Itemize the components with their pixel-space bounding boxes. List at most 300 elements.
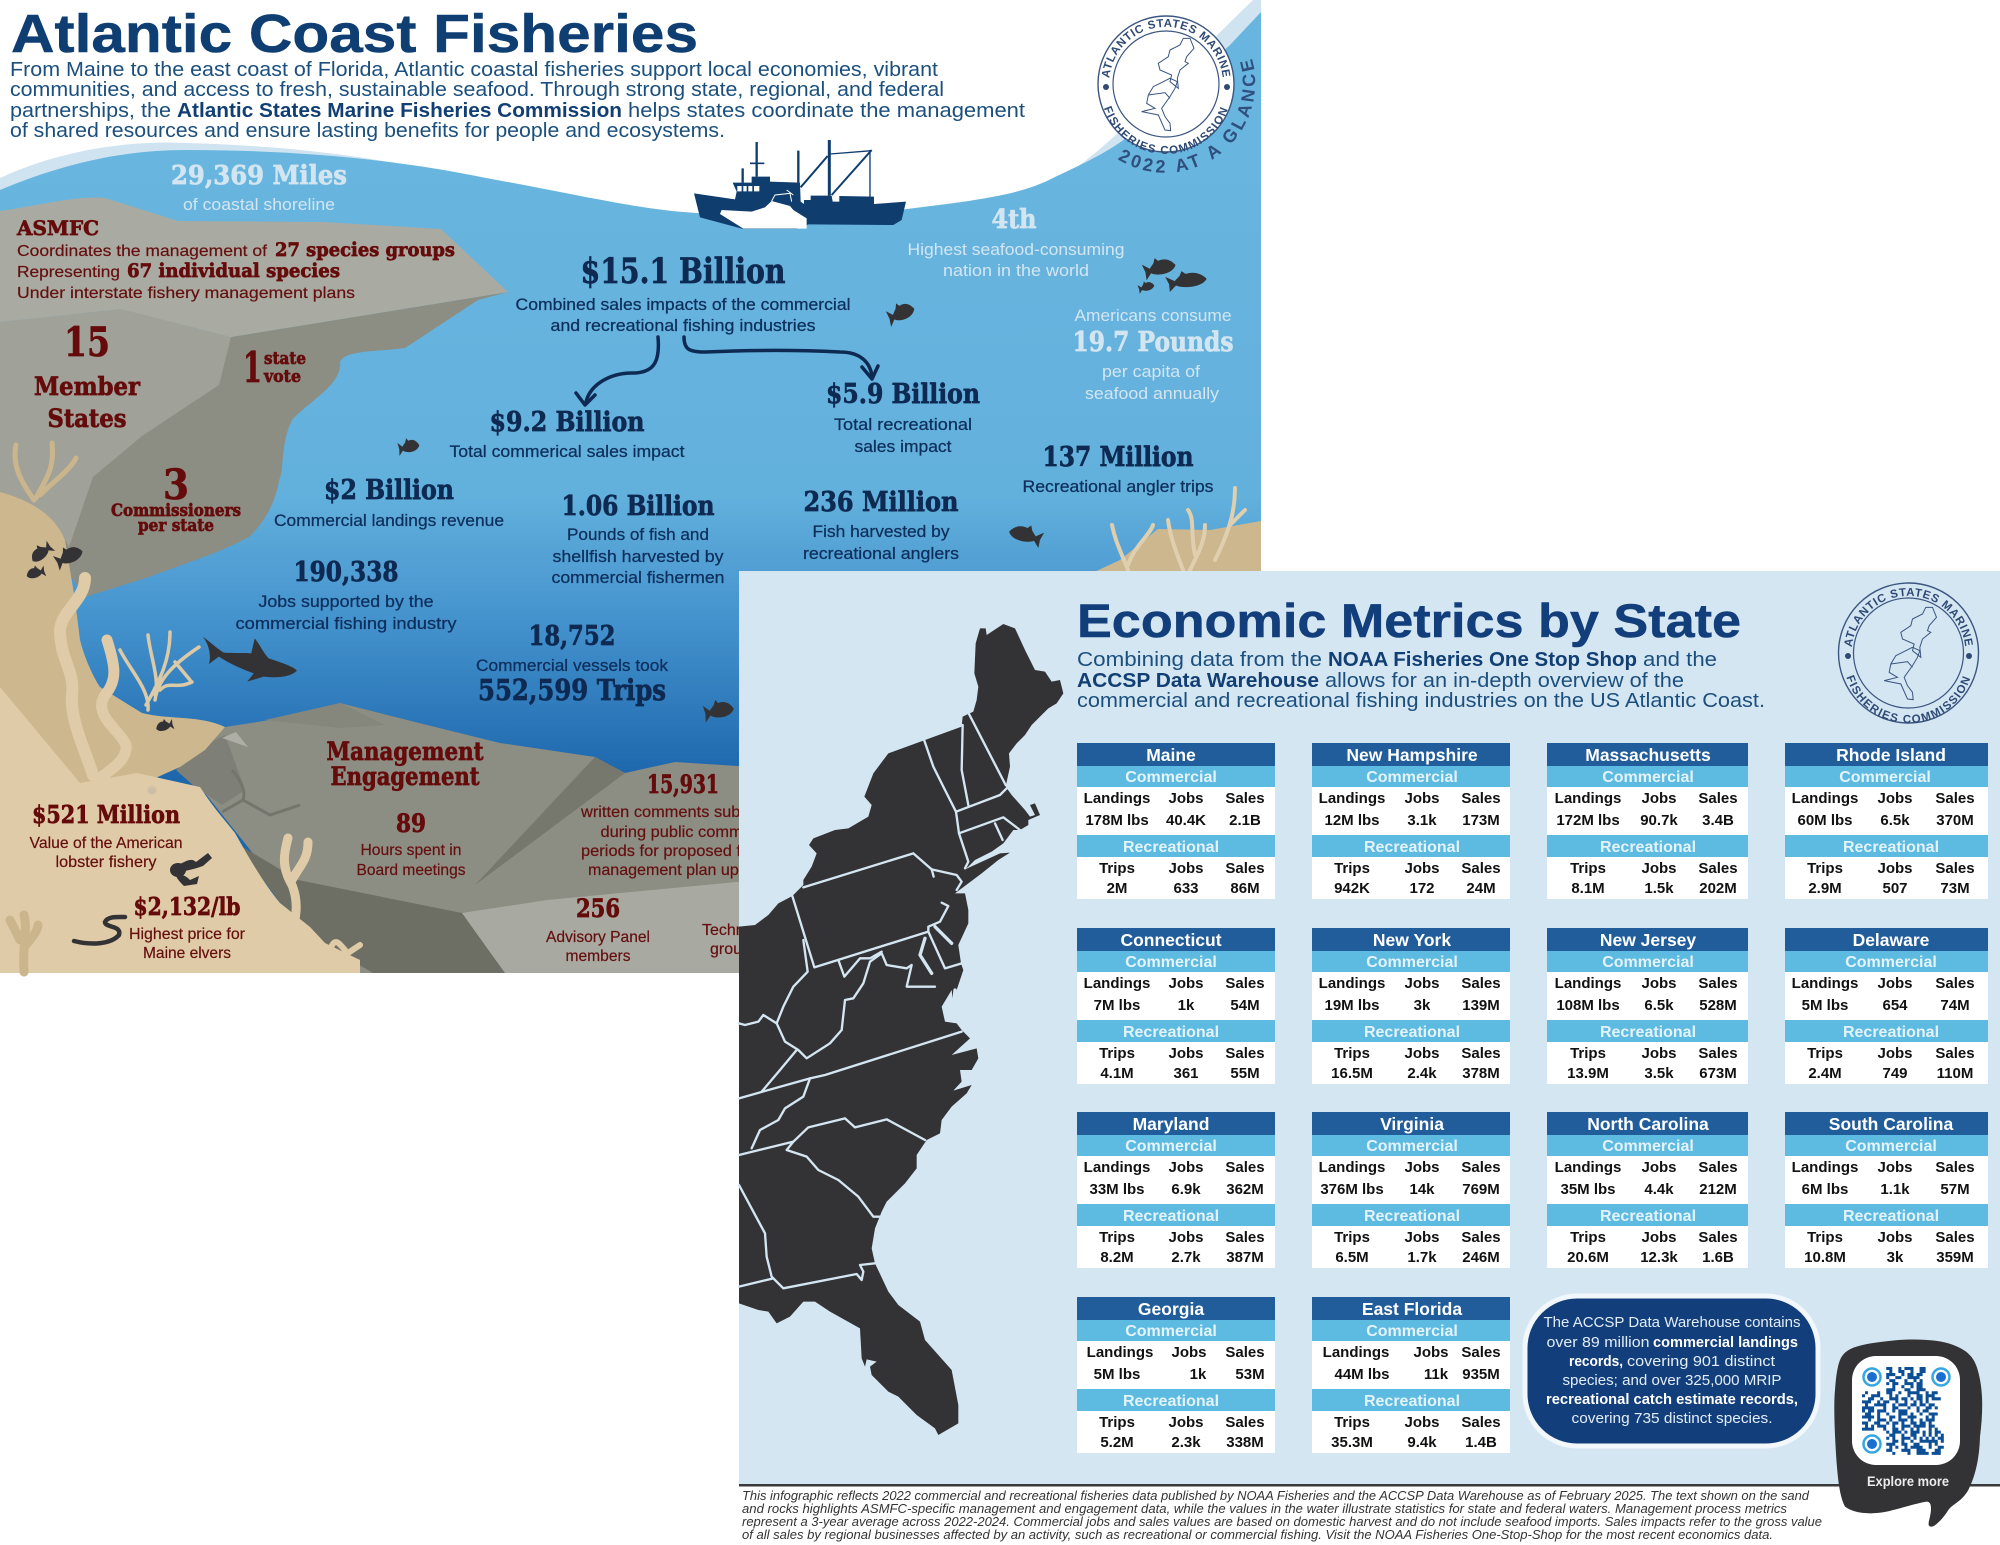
card: North Carolina: 1.6B <box>1702 1249 1734 1266</box>
sand: left seabed <box>0 492 360 973</box>
card: Rhode Island: Commercial <box>1839 769 1931 786</box>
callout: ACCSP data warehouse <box>1525 1296 1818 1446</box>
text block: data intro: allows for an in-depth overview of the <box>1325 670 1684 692</box>
card: Maine: Trips <box>1099 860 1135 877</box>
icon: ASMFC seal small: FISHERIES COMMISSION <box>1846 674 1970 723</box>
card: Virginia: 1.7k <box>1407 1249 1437 1266</box>
stat: fish harvested: recreational anglers <box>803 545 959 563</box>
card: Maryland <box>1077 1112 1275 1268</box>
stat: coastal shoreline: of coastal shoreline <box>183 196 335 214</box>
stat: landings revenue <box>274 475 504 530</box>
card: Connecticut: 54M <box>1230 997 1260 1014</box>
stat: member states <box>34 319 141 433</box>
card: Virginia: 246M <box>1462 1249 1500 1266</box>
stat: fish harvested: Fish harvested by <box>812 523 950 541</box>
stat: vessels and trips <box>476 621 669 707</box>
card: Massachusetts: 8.1M <box>1571 880 1605 897</box>
stat: angler trips: Recreational angler trips <box>1022 478 1214 496</box>
stat: landings revenue: Commercial landings revenue <box>274 512 504 530</box>
text: 2022 at a glance: 2022 AT A GLANCE <box>1118 59 1256 173</box>
stat: combined sales: Combined sales impacts of the commercial <box>516 296 850 314</box>
card: North Carolina: Jobs <box>1641 1159 1677 1176</box>
card: Delaware: Recreational <box>1843 1024 1939 1041</box>
card: Delaware: 749 <box>1882 1065 1908 1082</box>
text block: data intro <box>1077 649 1765 712</box>
card: Rhode Island: 370M <box>1936 812 1974 829</box>
card: Georgia: Landings <box>1087 1344 1153 1361</box>
card: North Carolina: 20.6M <box>1567 1249 1609 1266</box>
card: Maryland: 387M <box>1226 1249 1264 1266</box>
card: Maine: Jobs <box>1168 790 1204 807</box>
card: New Jersey: 3.5k <box>1644 1065 1674 1082</box>
card: New Jersey: 673M <box>1699 1065 1737 1082</box>
card: Maryland: Recreational <box>1123 1208 1219 1225</box>
stat: state vote: 1 <box>243 343 262 392</box>
stat: member states: Member <box>34 372 141 401</box>
card: Rhode Island <box>1785 743 1988 899</box>
card: East Florida <box>1312 1297 1510 1453</box>
icon: ASMFC seal small: ATLANTIC STATES MARINE <box>1844 588 1973 647</box>
card: Virginia: Virginia <box>1380 1114 1444 1134</box>
stat: elver price: $2,132/lb <box>134 892 240 921</box>
icon: fish silhouettes <box>25 254 1209 734</box>
stat: coastal shoreline: 29,369 Miles <box>171 161 347 191</box>
footnote rule and text: This infographic reflects 2022 commercial and recreational fisheries data published by NOAA Fisheries and the ACCSP Data Warehouse as of February 2025. The text shown on the sand <box>742 1488 1810 1503</box>
footnote rule and text: of all sales by regional businesses affected by an activity, such as recreational or commercial fishing. Visit the NOAA Fisheries One-Stop-Shop for the most recent economics data. <box>742 1527 1773 1542</box>
card: Rhode Island: 507 <box>1882 880 1908 897</box>
stat: vessels and trips: 18,752 <box>528 621 616 652</box>
stat: advisory panel: Advisory Panel <box>546 929 650 946</box>
stat: technical groups <box>702 922 769 958</box>
card: Georgia: 53M <box>1235 1366 1265 1383</box>
card: New York: Commercial <box>1366 954 1458 971</box>
card: North Carolina: 212M <box>1699 1181 1737 1198</box>
text block: data intro: and the <box>1643 649 1717 671</box>
card: Virginia: Sales <box>1461 1229 1501 1246</box>
icon: eel <box>74 917 125 943</box>
card: South Carolina: Landings <box>1792 1159 1858 1176</box>
card: Connecticut: 4.1M <box>1100 1065 1134 1082</box>
card: Georgia: 5M lbs <box>1094 1366 1140 1383</box>
card: East Florida: 11k <box>1424 1366 1449 1383</box>
card: New York: Jobs <box>1404 975 1440 992</box>
stat: technical groups: Technical <box>702 922 769 939</box>
card: Georgia: 5.2M <box>1100 1434 1134 1451</box>
card: New York: 378M <box>1462 1065 1500 1082</box>
card: Rhode Island: Jobs <box>1877 860 1913 877</box>
stat: commissioners: per state <box>138 516 214 536</box>
card: Virginia: Trips <box>1334 1229 1370 1246</box>
stat: pounds harvested: commercial fishermen <box>552 569 724 587</box>
card: Georgia: 2.3k <box>1171 1434 1201 1451</box>
card: Maine: 633 <box>1173 880 1199 897</box>
card: Massachusetts: Jobs <box>1641 860 1677 877</box>
card: Delaware: 5M lbs <box>1802 997 1848 1014</box>
card: Maryland: Sales <box>1225 1159 1265 1176</box>
stat: lobster value: lobster fishery <box>56 854 156 871</box>
stat: per capita seafood: Americans consume <box>1074 307 1232 325</box>
card: East Florida: 1.4B <box>1465 1434 1497 1451</box>
stat: advisory panel: members <box>566 948 630 965</box>
card: New Hampshire: 173M <box>1462 812 1500 829</box>
callout: ACCSP data warehouse: over 89 million <box>1546 1334 1650 1351</box>
card: South Carolina: Sales <box>1935 1229 1975 1246</box>
panel: Atlantic Coast Fisheries poster <box>0 0 1261 976</box>
card: South Carolina: Trips <box>1807 1229 1843 1246</box>
rock: lower engagement shelf <box>176 703 800 973</box>
card: Maine: Landings <box>1084 790 1150 807</box>
stat: written comments: during public comment <box>600 824 766 841</box>
stat: angler trips: 137 Million <box>1042 442 1194 473</box>
card: South Carolina: Commercial <box>1845 1138 1937 1155</box>
stat: commercial jobs <box>236 557 457 633</box>
card: Connecticut: 7M lbs <box>1094 997 1140 1014</box>
card: New Jersey: 6.5k <box>1644 997 1674 1014</box>
card: East Florida: Landings <box>1323 1344 1389 1361</box>
coral and kelp: left <box>10 443 360 972</box>
card: New Jersey: Sales <box>1698 1045 1738 1062</box>
icon: fishing boats <box>694 140 906 229</box>
card: Massachusetts: Trips <box>1570 860 1606 877</box>
card: Maryland: Trips <box>1099 1229 1135 1246</box>
stat: landings revenue: $2 Billion <box>324 475 454 506</box>
card: Connecticut: Sales <box>1225 975 1265 992</box>
card: New Hampshire: 3.1k <box>1407 812 1437 829</box>
card: South Carolina: Jobs <box>1877 1159 1913 1176</box>
card: New Jersey: Trips <box>1570 1045 1606 1062</box>
card: New Hampshire: New Hampshire <box>1346 745 1478 765</box>
card: South Carolina: 10.8M <box>1804 1249 1846 1266</box>
stat: advisory panel: 256 <box>576 894 620 923</box>
stat: board meeting hours: Board meetings <box>356 862 466 879</box>
card: East Florida: 9.4k <box>1407 1434 1437 1451</box>
card: North Carolina <box>1547 1112 1748 1268</box>
card: New Jersey: 108M lbs <box>1556 997 1620 1014</box>
card: Delaware: Landings <box>1792 975 1858 992</box>
card: Maryland: 6.9k <box>1171 1181 1201 1198</box>
stat: combined sales <box>516 251 850 335</box>
card: Maryland: 33M lbs <box>1089 1181 1145 1198</box>
card: New Hampshire <box>1312 743 1510 899</box>
stat: commercial sales impact <box>450 407 685 461</box>
card: Delaware: Jobs <box>1877 975 1913 992</box>
title: Economic Metrics by State: Economic Metrics by State <box>1077 594 1741 647</box>
card: East Florida: Sales <box>1461 1344 1501 1361</box>
card: Georgia: Georgia <box>1138 1299 1204 1319</box>
card: Massachusetts: 202M <box>1699 880 1737 897</box>
card: Delaware: Commercial <box>1845 954 1937 971</box>
stat: written comments: written comments submitted <box>580 804 785 821</box>
text block: ASMFC: 27 species groups <box>275 239 455 261</box>
sand and coral: right <box>1077 488 1261 600</box>
stat: board meeting hours: Hours spent in <box>360 842 462 859</box>
stat: commissioners: Commissioners <box>111 501 241 521</box>
card: Connecticut: 361 <box>1173 1065 1199 1082</box>
water <box>0 12 1261 973</box>
card: Rhode Island: Sales <box>1935 860 1975 877</box>
card: Massachusetts: Commercial <box>1602 769 1694 786</box>
card: Connecticut: Landings <box>1084 975 1150 992</box>
stat: state vote <box>243 343 306 392</box>
card: Virginia: Recreational <box>1364 1208 1460 1225</box>
card: Virginia: Jobs <box>1404 1229 1440 1246</box>
card: North Carolina: Landings <box>1555 1159 1621 1176</box>
card: North Carolina: Recreational <box>1600 1208 1696 1225</box>
card: Maryland: Jobs <box>1168 1159 1204 1176</box>
card: East Florida: Jobs <box>1404 1414 1440 1431</box>
card: New Jersey: 528M <box>1699 997 1737 1014</box>
card: Delaware: Delaware <box>1853 930 1930 950</box>
stat: vessels and trips: 552,599 Trips <box>478 673 666 707</box>
stat: seafood consumption rank: nation in the world <box>943 262 1089 280</box>
card: Maine <box>1077 743 1275 899</box>
card: Delaware: 2.4M <box>1808 1065 1842 1082</box>
QR code speech bubble: Explore more <box>1867 1473 1949 1489</box>
card: Maryland: Commercial <box>1125 1138 1217 1155</box>
stat: recreational sales impact: Total recreational <box>834 416 972 434</box>
card: Maryland: 362M <box>1226 1181 1264 1198</box>
card: Maryland: 8.2M <box>1100 1249 1134 1266</box>
card: North Carolina: 12.3k <box>1640 1249 1678 1266</box>
card: Delaware: Jobs <box>1877 1045 1913 1062</box>
card: Rhode Island: Trips <box>1807 860 1843 877</box>
stat: per capita seafood <box>1072 307 1234 403</box>
card: Maine: Commercial <box>1125 769 1217 786</box>
card: Rhode Island: Sales <box>1935 790 1975 807</box>
intro paragraph: From Maine to the east coast of Florida, Atlantic coastal fisheries support local economies, vibrant <box>10 59 938 81</box>
stat: written comments: management plan updates <box>588 862 778 879</box>
icon: shark <box>203 637 297 682</box>
card: New York: Trips <box>1334 1045 1370 1062</box>
stat: commercial jobs: commercial fishing industry <box>236 615 457 633</box>
card: North Carolina: Sales <box>1698 1159 1738 1176</box>
card: South Carolina: 3k <box>1887 1249 1904 1266</box>
card: Delaware: 74M <box>1940 997 1970 1014</box>
intro paragraph: of shared resources and ensure lasting benefits for people and ecosystems. <box>10 120 725 142</box>
stat: combined sales: $15.1 Billion <box>580 251 786 292</box>
card: New York: Sales <box>1461 1045 1501 1062</box>
card: New York: Jobs <box>1404 1045 1440 1062</box>
card: North Carolina: Trips <box>1570 1229 1606 1246</box>
text block: ASMFC: ASMFC <box>16 216 99 240</box>
card: Virginia: 769M <box>1462 1181 1500 1198</box>
stat: pounds harvested: 1.06 Billion <box>562 491 715 522</box>
card: New Hampshire: Trips <box>1334 860 1370 877</box>
card: Georgia: Recreational <box>1123 1393 1219 1410</box>
card: South Carolina: 1.1k <box>1880 1181 1910 1198</box>
card: Connecticut: Jobs <box>1168 975 1204 992</box>
card: New Hampshire: Landings <box>1319 790 1385 807</box>
card: North Carolina: 4.4k <box>1644 1181 1674 1198</box>
footnote rule and text: represent a 3-year average across 2022-2024. Commercial jobs and sales values are based on domestic harvest and do not include seafood imports. Sales impacts refer to the gross value <box>742 1514 1822 1529</box>
stat: written comments <box>580 770 785 879</box>
card: Virginia: 14k <box>1409 1181 1435 1198</box>
card: Rhode Island: Landings <box>1792 790 1858 807</box>
card: South Carolina <box>1785 1112 1988 1268</box>
card: Massachusetts: 172M lbs <box>1556 812 1620 829</box>
card: New Hampshire: Jobs <box>1404 790 1440 807</box>
card: Maryland: 2.7k <box>1171 1249 1201 1266</box>
card: New Hampshire: 24M <box>1466 880 1496 897</box>
stat: fish harvested: 236 Million <box>804 487 959 518</box>
card: South Carolina: 359M <box>1936 1249 1974 1266</box>
stat: commissioners: 3 <box>163 461 189 509</box>
wave highlight band <box>0 0 1261 200</box>
card: Connecticut: Commercial <box>1125 954 1217 971</box>
card: Georgia <box>1077 1297 1275 1453</box>
card: Connecticut: Trips <box>1099 1045 1135 1062</box>
card: South Carolina: 6M lbs <box>1802 1181 1848 1198</box>
footnote rule and text <box>739 1484 2000 1542</box>
stat: seafood consumption rank <box>908 205 1124 280</box>
text block: data intro: ACCSP Data Warehouse <box>1077 670 1319 692</box>
text block: data intro: commercial and recreational fishing industries on the US Atlantic Coast. <box>1077 690 1765 712</box>
stat: commercial sales impact: $9.2 Billion <box>490 407 645 438</box>
card: Maine: Jobs <box>1168 860 1204 877</box>
card: Massachusetts: Recreational <box>1600 839 1696 856</box>
card: Massachusetts: 1.5k <box>1644 880 1674 897</box>
card: New York: 3k <box>1414 997 1431 1014</box>
card: New York <box>1312 928 1510 1084</box>
card: East Florida: 935M <box>1462 1366 1500 1383</box>
card: Virginia <box>1312 1112 1510 1268</box>
card: Maine: 178M lbs <box>1085 812 1149 829</box>
card: East Florida: East Florida <box>1362 1299 1462 1319</box>
card: Delaware: Sales <box>1935 1045 1975 1062</box>
card: Rhode Island: 2.9M <box>1808 880 1842 897</box>
card: Georgia: 1k <box>1190 1366 1207 1383</box>
card: Massachusetts: Sales <box>1698 860 1738 877</box>
card: Maine: 2M <box>1107 880 1127 897</box>
card: Delaware: 654 <box>1882 997 1908 1014</box>
card: South Carolina: Jobs <box>1877 1229 1913 1246</box>
callout: ACCSP data warehouse: recreational catch estimate records, <box>1546 1391 1798 1408</box>
card: New York: Landings <box>1319 975 1385 992</box>
card: Rhode Island: 60M lbs <box>1797 812 1853 829</box>
card: New Jersey: Jobs <box>1641 1045 1677 1062</box>
heading: management engagement: Engagement <box>330 762 480 791</box>
card: Massachusetts <box>1547 743 1748 899</box>
card: New Hampshire: 12M lbs <box>1324 812 1380 829</box>
stat: member states: 15 <box>64 319 110 366</box>
icon: ASMFC seal <box>1097 15 1235 154</box>
QR code speech bubble <box>1834 1339 1982 1527</box>
card: Maryland: Maryland <box>1133 1114 1209 1134</box>
card: Maine: Maine <box>1146 745 1196 765</box>
stat: written comments: periods for proposed fishery <box>581 843 785 860</box>
card: Rhode Island: Rhode Island <box>1836 745 1946 765</box>
stat: pounds harvested: Pounds of fish and <box>567 526 709 544</box>
stat: member states: States <box>48 404 126 433</box>
stat: commercial jobs: Jobs supported by the <box>258 593 434 611</box>
card: North Carolina: Commercial <box>1602 1138 1694 1155</box>
card: North Carolina: Jobs <box>1641 1229 1677 1246</box>
stat: coastal shoreline <box>171 161 347 214</box>
card: New York: 139M <box>1462 997 1500 1014</box>
map: Atlantic coast states <box>739 624 1063 1435</box>
card: Massachusetts: Sales <box>1698 790 1738 807</box>
card: New Jersey: Recreational <box>1600 1024 1696 1041</box>
card: Georgia: Jobs <box>1171 1344 1207 1361</box>
text block: ASMFC: Representing <box>17 264 120 281</box>
card: Connecticut <box>1077 928 1275 1084</box>
card: Maine: Recreational <box>1123 839 1219 856</box>
stat: board meeting hours: 89 <box>396 809 426 838</box>
stat: per capita seafood: 19.7 Pounds <box>1072 327 1234 358</box>
card: East Florida: Commercial <box>1366 1323 1458 1340</box>
card: Georgia: 338M <box>1226 1434 1264 1451</box>
card: East Florida: Recreational <box>1364 1393 1460 1410</box>
stat: seafood consumption rank: Highest seafood-consuming <box>908 241 1124 259</box>
card: Maine: 2.1B <box>1229 812 1261 829</box>
stat: commercial sales impact: Total commerical sales impact <box>450 443 685 461</box>
card: New York: 16.5M <box>1331 1065 1373 1082</box>
card: Rhode Island: Jobs <box>1877 790 1913 807</box>
card: North Carolina: Sales <box>1698 1229 1738 1246</box>
stat: fish harvested <box>803 487 959 563</box>
text block: ASMFC: 67 individual species <box>127 260 340 282</box>
stat: lobster value <box>30 800 182 871</box>
card: New Hampshire: Jobs <box>1404 860 1440 877</box>
heading: management engagement <box>326 737 484 791</box>
card: Rhode Island: Recreational <box>1843 839 1939 856</box>
card: East Florida: 35.3M <box>1331 1434 1373 1451</box>
stat: per capita seafood: per capita of <box>1102 363 1200 381</box>
card: New York: 2.4k <box>1407 1065 1437 1082</box>
card: Georgia: Jobs <box>1168 1414 1204 1431</box>
rock: upper left shelf <box>0 197 508 597</box>
card: New York: New York <box>1373 930 1451 950</box>
card: Rhode Island: 73M <box>1940 880 1970 897</box>
card: New Jersey: Jobs <box>1641 975 1677 992</box>
stat: pounds harvested <box>552 491 724 587</box>
stat: recreational sales impact: sales impact <box>854 438 952 456</box>
intro paragraph: Atlantic States Marine Fisheries Commission <box>177 100 622 122</box>
icon: ASMFC seal small <box>1838 582 1980 724</box>
title: Atlantic Coast Fisheries <box>11 4 698 64</box>
card: Georgia: Sales <box>1225 1344 1265 1361</box>
card: Maine: 40.4K <box>1166 812 1206 829</box>
card: New Hampshire: 172 <box>1409 880 1435 897</box>
card: Maine: Sales <box>1225 860 1265 877</box>
card: Maryland: Sales <box>1225 1229 1265 1246</box>
text block: ASMFC: Coordinates the management of <box>17 243 268 260</box>
card: Connecticut: Connecticut <box>1120 930 1222 950</box>
text block: data intro: NOAA Fisheries One Stop Shop <box>1328 649 1637 671</box>
stat: technical groups: groups <box>710 941 759 958</box>
card: East Florida: Jobs <box>1413 1344 1449 1361</box>
card: South Carolina: 57M <box>1940 1181 1970 1198</box>
card: New Jersey: New Jersey <box>1600 930 1696 950</box>
card: Massachusetts: 90.7k <box>1640 812 1678 829</box>
card: Rhode Island: 6.5k <box>1880 812 1910 829</box>
stat: seafood consumption rank: 4th <box>992 205 1037 235</box>
card: Virginia: Sales <box>1461 1159 1501 1176</box>
card: New Jersey: Commercial <box>1602 954 1694 971</box>
card: Virginia: Commercial <box>1366 1138 1458 1155</box>
card: North Carolina: 35M lbs <box>1560 1181 1616 1198</box>
card: Connecticut: Jobs <box>1168 1045 1204 1062</box>
stat: board meeting hours <box>356 809 466 879</box>
callout: ACCSP data warehouse: species; and over 325,000 MRIP <box>1562 1372 1782 1389</box>
card: Delaware <box>1785 928 1988 1084</box>
card: South Carolina: Sales <box>1935 1159 1975 1176</box>
card: Delaware: 110M <box>1937 1065 1973 1082</box>
intro paragraph: partnerships, the <box>10 100 171 122</box>
card: New Hampshire: Recreational <box>1364 839 1460 856</box>
card: Virginia: 376M lbs <box>1320 1181 1384 1198</box>
stat: lobster value: Value of the American <box>30 835 182 852</box>
